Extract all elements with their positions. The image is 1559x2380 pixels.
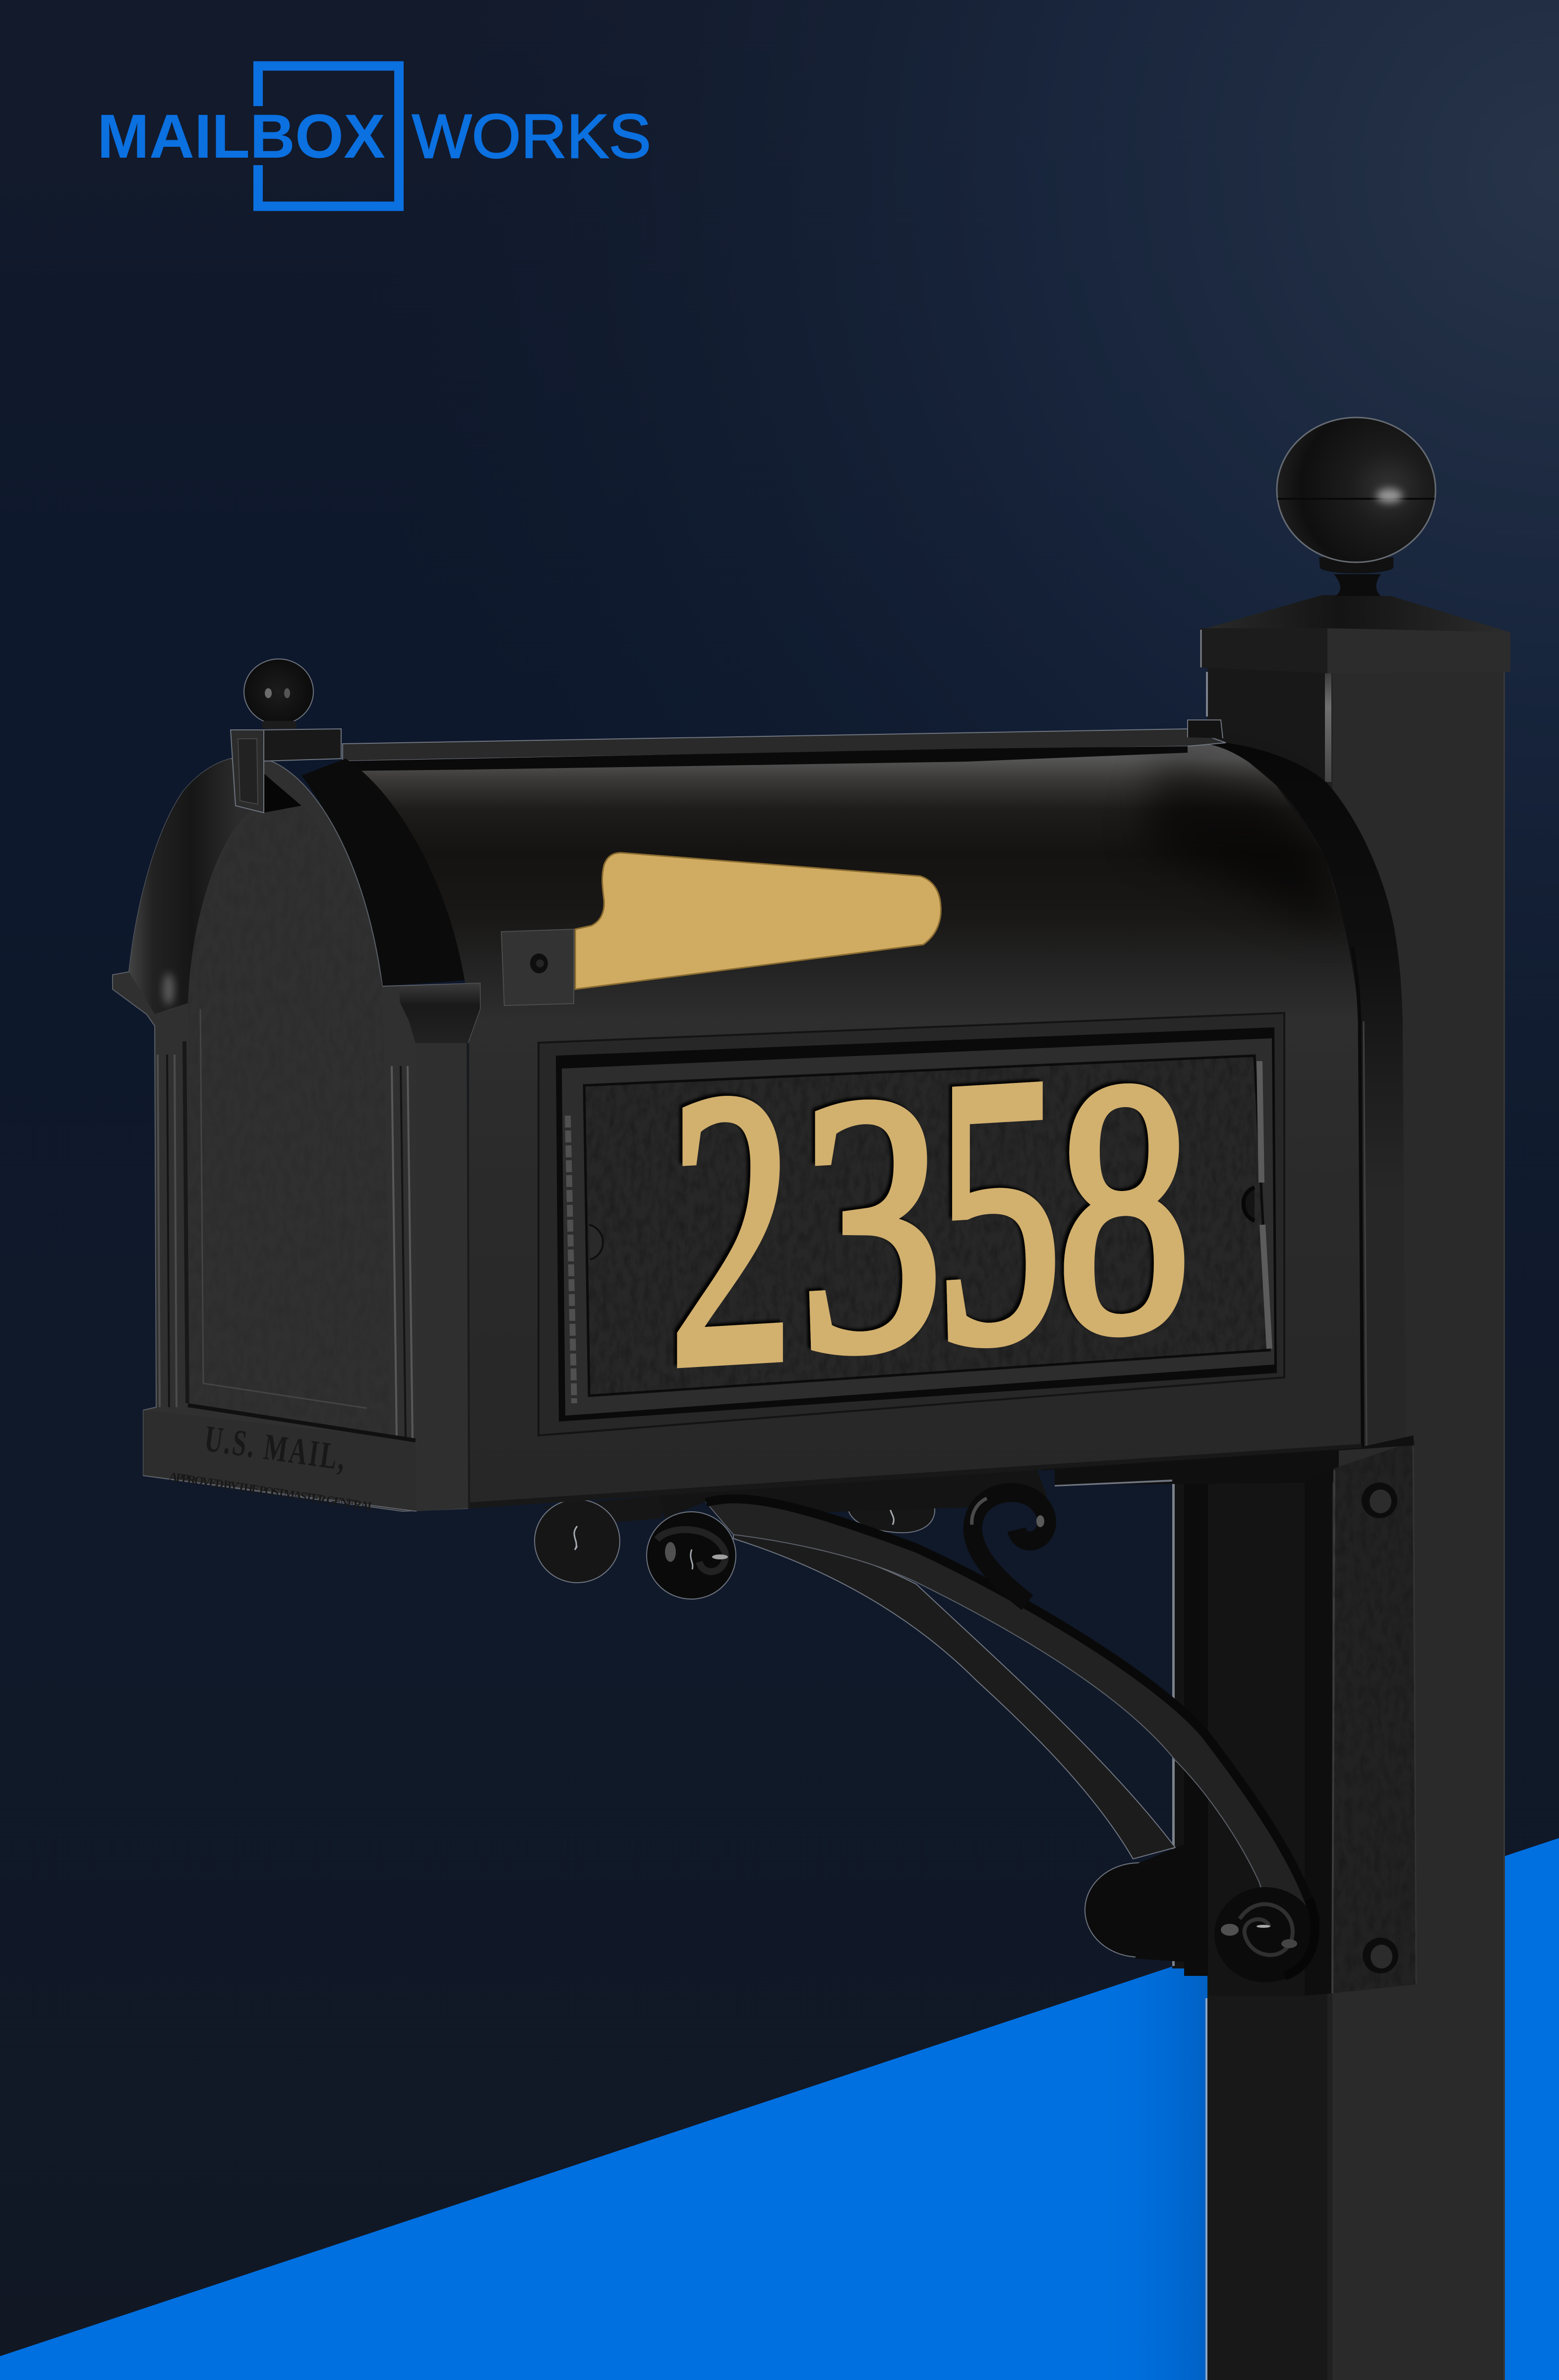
- middle tab: [847, 1493, 935, 1533]
- door base lettering: [168, 1418, 376, 1514]
- top rim: [343, 720, 1226, 771]
- screw: [530, 953, 548, 973]
- logo: Mailbox Works: [97, 66, 651, 206]
- shadow under rim right: [1140, 761, 1339, 932]
- keyhole notch right: [1244, 1188, 1255, 1221]
- mailbox body: [343, 729, 1362, 1508]
- upper arm dark top edge: [706, 1499, 1317, 1923]
- blue diagonal wedge: [0, 1838, 1559, 2380]
- door side shelf: [400, 983, 480, 1044]
- scroll lower: [1214, 1887, 1317, 1982]
- post left face: [1207, 664, 1329, 2380]
- logo word: WORKS: WORKS: [412, 102, 651, 171]
- bottom flange: [1041, 1435, 1414, 1471]
- door side face: [416, 1043, 469, 1511]
- rivet top: [1362, 1483, 1397, 1518]
- logo word: MAILBOX: MAILBOX: [97, 102, 385, 171]
- digit 3: 3: [799, 1015, 943, 1430]
- lower arm: [733, 1535, 1175, 1859]
- right end band: [1205, 743, 1406, 1450]
- door base: [143, 1410, 417, 1511]
- house number 2358: [669, 996, 1191, 1449]
- digit 5: 5: [935, 996, 1062, 1426]
- back plate and support bar: [1055, 1450, 1339, 1996]
- address plaque: [539, 1013, 1284, 1435]
- door arch band: [129, 759, 264, 1014]
- right pilaster: [392, 1066, 413, 1440]
- scroll bracket: [535, 1467, 1317, 1982]
- left pilaster: [158, 1041, 187, 1407]
- small ball knob: [244, 659, 313, 729]
- mounting plate with rivets: [1305, 1442, 1416, 1996]
- door panel: [188, 806, 392, 1441]
- ball finial: [1277, 417, 1436, 596]
- post right face: [1327, 664, 1505, 2380]
- plaque left highlight: [568, 1116, 574, 1403]
- cap: [1200, 595, 1510, 673]
- plaque right highlight: [1259, 1061, 1269, 1349]
- scroll left: [647, 1512, 736, 1599]
- flag mounting plate: [501, 929, 574, 1006]
- rivet bottom: [1363, 1938, 1398, 1973]
- scroll right: [972, 1492, 1047, 1603]
- gold flag: [575, 853, 941, 989]
- plaque texture: [584, 1056, 1269, 1396]
- digit 2: 2: [669, 1008, 793, 1449]
- door silhouette: [113, 759, 480, 1511]
- large disc lower: [1085, 1863, 1193, 1957]
- mailbox: [113, 659, 1414, 1514]
- post with ball finial: [1200, 417, 1510, 2380]
- left end curved band: [301, 759, 465, 986]
- upper arm: [706, 1499, 1317, 1923]
- arch gloss: [163, 973, 174, 1005]
- door end: [113, 659, 480, 1514]
- black recess under arch: [264, 774, 301, 813]
- logo frame: [258, 66, 399, 206]
- door panel inset line: [200, 1009, 367, 1408]
- mounting disc left: [535, 1495, 662, 1583]
- approval lettering: APPROVED BY THE POSTMASTER GENERAL: [168, 1470, 376, 1514]
- underside strip: [658, 1467, 1047, 1518]
- digit 8: 8: [1057, 1003, 1191, 1411]
- U.S. MAIL lettering: U.S. MAIL,: [202, 1418, 348, 1478]
- top post ornament bracket: [231, 729, 341, 813]
- keyhole notch left: [589, 1225, 603, 1259]
